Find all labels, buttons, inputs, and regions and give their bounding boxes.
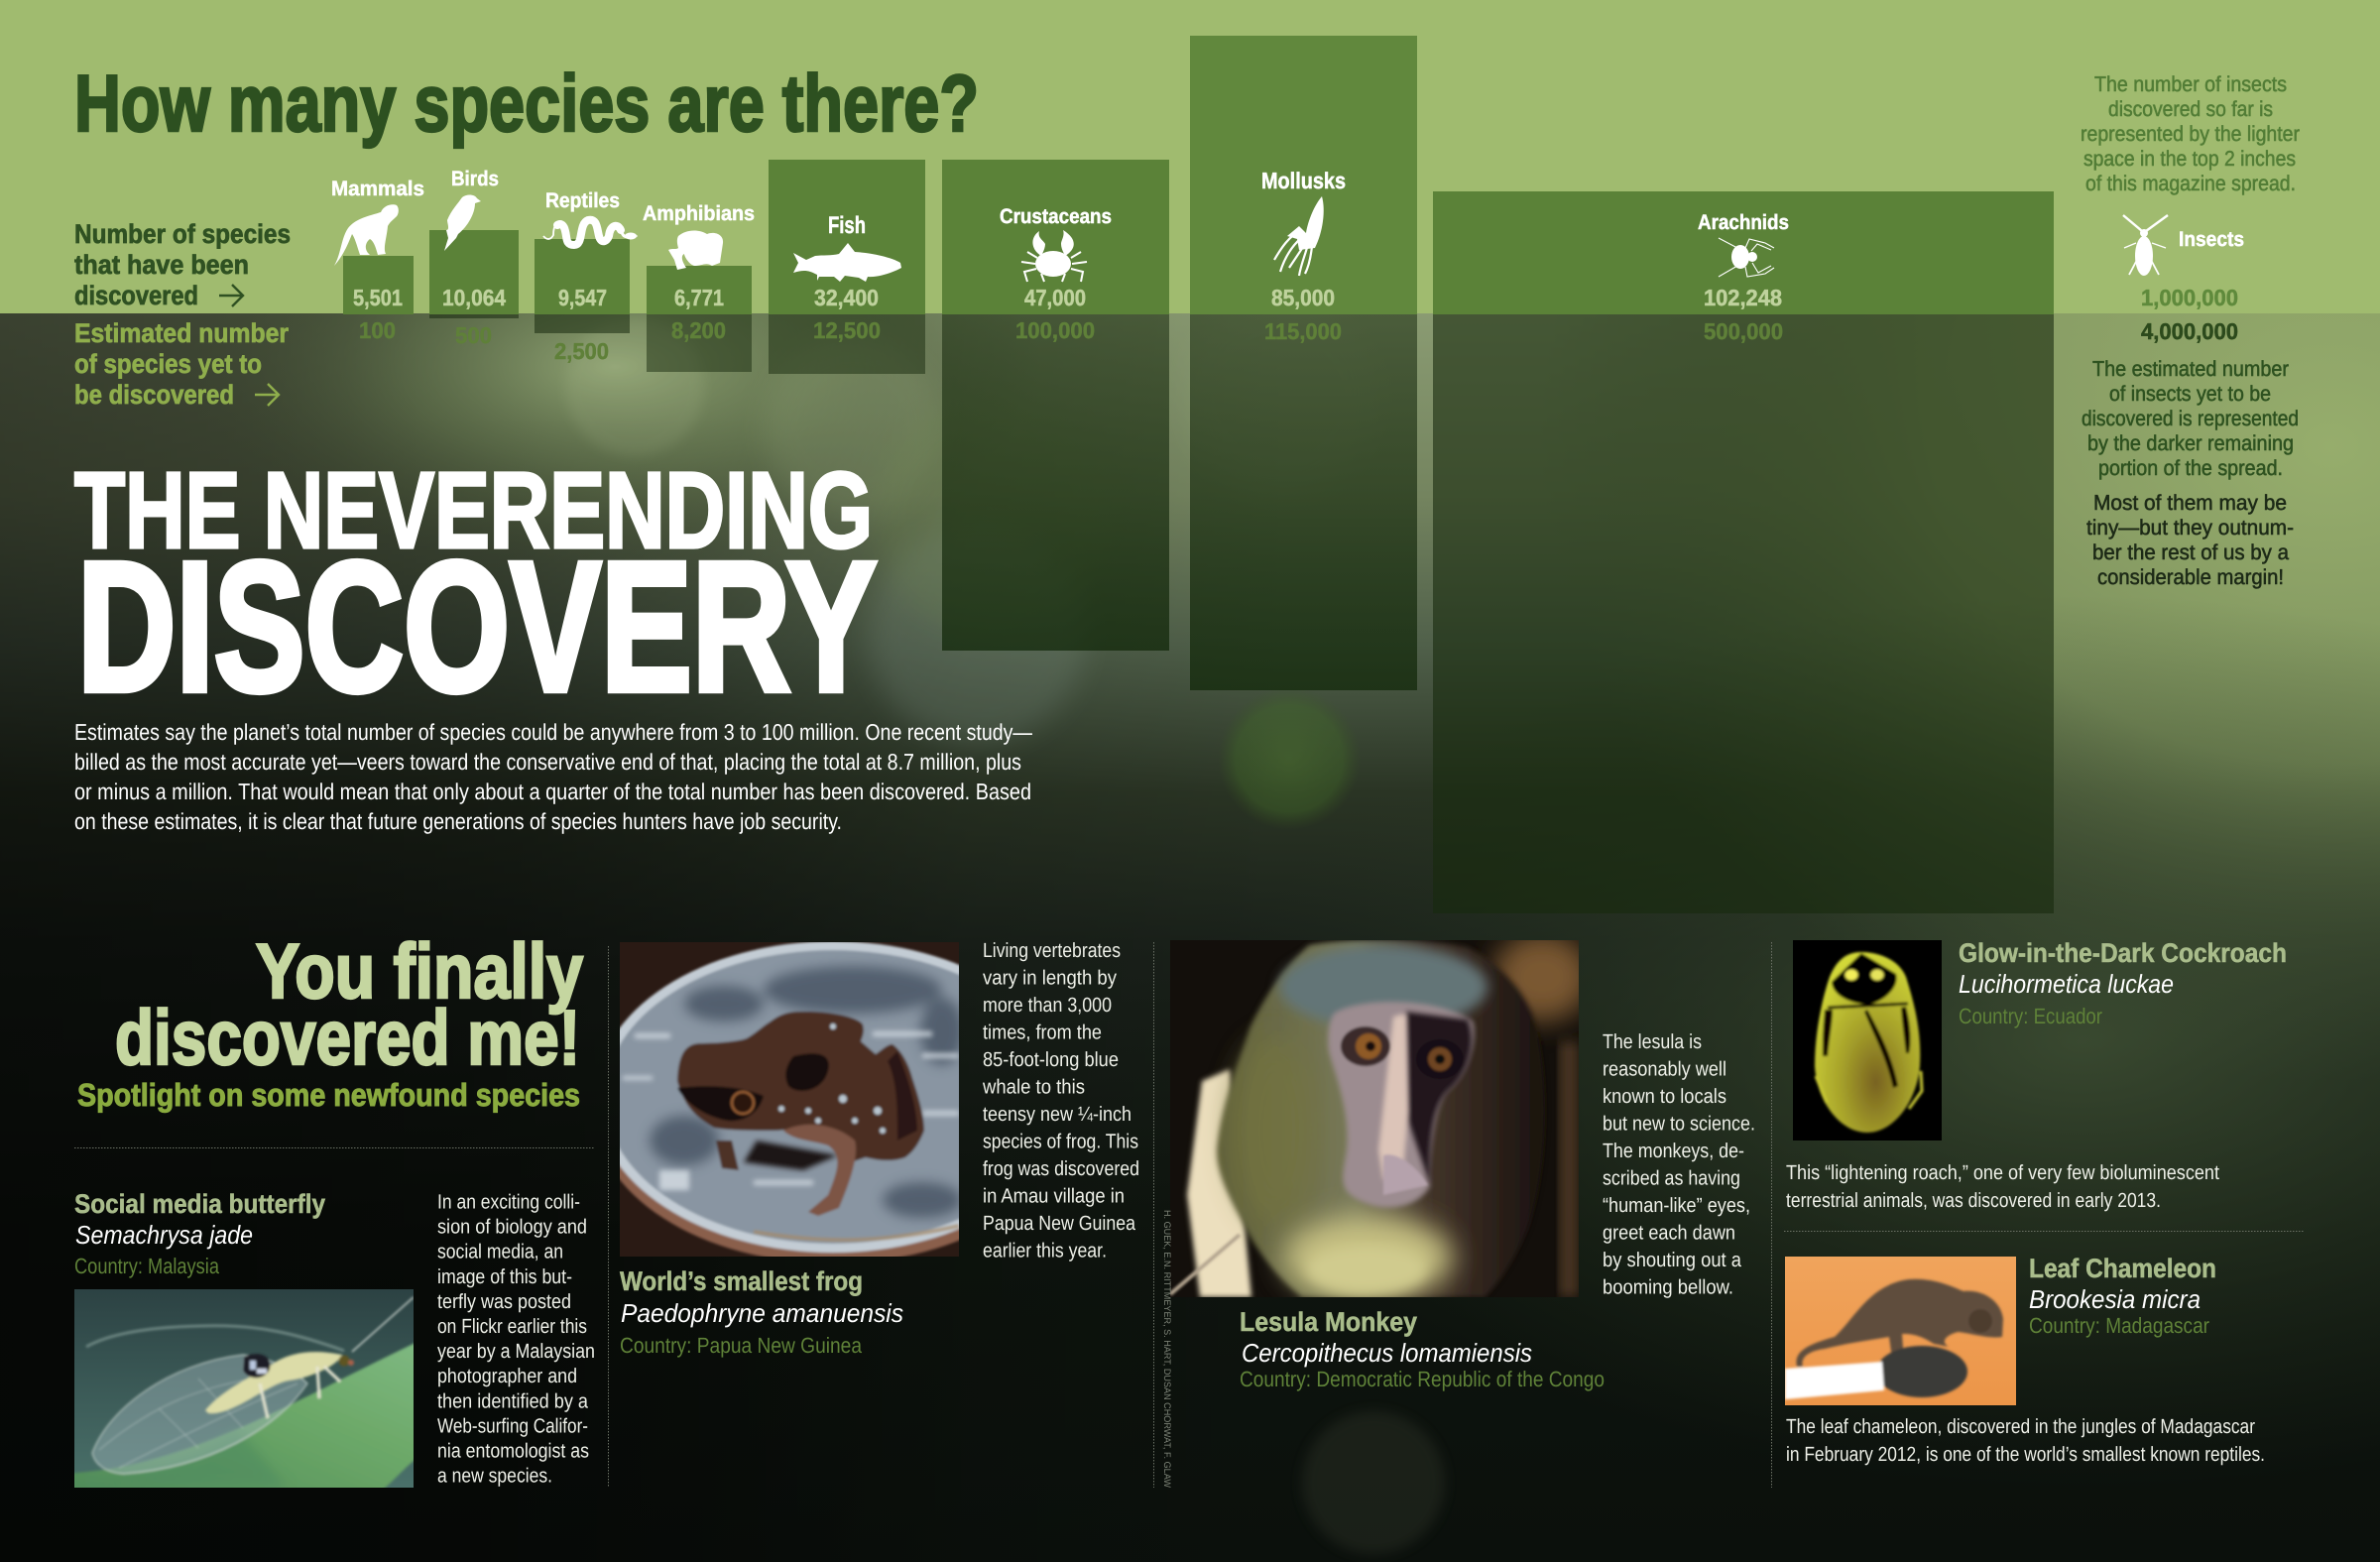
numbers: discovered: 10,064	[442, 285, 506, 310]
species heading: Cercopithecus lomamiensis	[1242, 1338, 1532, 1368]
numbers: yet to be discovered: 12,500	[813, 317, 881, 343]
text: insects yet to be discovered: The estimated number	[2092, 357, 2289, 381]
numbers: yet to be discovered: 100,000	[1015, 317, 1095, 343]
species heading: Country: Malaysia	[74, 1254, 220, 1278]
text: insects yet to be discovered: discovered is represented	[2082, 407, 2299, 430]
species heading: Semachrysa jade	[75, 1220, 253, 1250]
bar: birds	[429, 230, 519, 318]
title: the neverending discovery: DISCOVERY	[77, 525, 877, 730]
text: insects so far: discovered so far is	[2108, 97, 2273, 121]
bar: amphibians	[647, 266, 752, 372]
panel: world's smallest frog	[593, 939, 1139, 1358]
body text: The lesula is	[1603, 1030, 1702, 1053]
icon: spider	[1719, 238, 1774, 277]
body text: but new to science.	[1603, 1113, 1755, 1135]
text: insects margin note: tiny—but they outnum-	[2086, 516, 2294, 540]
bar: mollusks	[1190, 36, 1417, 690]
species heading: Lucihormetica luckae	[1959, 969, 2174, 999]
body text: whale to this	[982, 1075, 1085, 1099]
species heading: Glow-in-the-Dark Cockroach	[1959, 938, 2287, 968]
body text: This “lightening roach,” one of very few bioluminescent	[1786, 1161, 2219, 1184]
chart: species bars	[343, 36, 2054, 913]
body text: nia entomologist as	[437, 1440, 589, 1462]
text: insects margin note: considerable margin!	[2097, 565, 2284, 589]
species heading: Brookesia micra	[2029, 1284, 2201, 1314]
background: light green upper band	[0, 0, 2380, 314]
body text: teensy new ¼-inch	[983, 1103, 1131, 1126]
species heading: Country: Papua New Guinea	[620, 1333, 863, 1358]
species heading: Lesula Monkey	[1240, 1307, 1417, 1337]
text: insects yet to be discovered: portion of the spread.	[2098, 456, 2283, 480]
numbers: discovered: 32,400	[814, 285, 879, 310]
photo: frog on a coin	[620, 942, 959, 1257]
intro paragraph: billed as the most accurate yet—veers toward the conservative end of that, placing the total at 8.7 million, plus	[74, 749, 1021, 775]
numbers: yet to be discovered: 115,000	[1264, 318, 1342, 344]
body text: 85-foot-long blue	[983, 1048, 1119, 1071]
body text: image of this but-	[437, 1265, 572, 1288]
text: insects yet to be discovered	[2082, 357, 2299, 480]
photo: chameleon on a match	[1785, 1257, 2016, 1405]
category labels: Mollusks	[1261, 168, 1346, 193]
category labels: Insects	[2179, 228, 2244, 251]
text: insects so far: represented by the lighter	[2081, 122, 2300, 146]
text: insects margin note: ber the rest of us by a	[2092, 541, 2289, 564]
category labels	[331, 168, 2244, 251]
numbers: discovered: 9,547	[558, 285, 607, 310]
heading: how many species: How many species are there?	[74, 60, 979, 149]
numbers: yet to be discovered: 2,500	[554, 338, 609, 364]
photo: monkey face	[1170, 940, 1579, 1297]
body text: Web-surfing Califor-	[437, 1414, 588, 1437]
body text: scribed as having	[1603, 1166, 1740, 1190]
title: the neverending discovery	[74, 450, 877, 730]
numbers: discovered: 47,000	[1024, 285, 1086, 310]
body text	[1603, 1030, 1755, 1299]
numbers: yet to be discovered	[359, 317, 2238, 364]
label: number discovered: discovered	[74, 281, 198, 310]
species heading	[620, 1266, 903, 1358]
species heading: Social media butterfly	[74, 1189, 325, 1219]
numbers: yet to be discovered: 500	[455, 322, 492, 348]
text: insects so far: of this magazine spread.	[2085, 172, 2296, 195]
species heading: Country: Ecuador	[1959, 1004, 2102, 1028]
numbers: yet to be discovered: 500,000	[1704, 318, 1783, 344]
photo credit: H. GUEK, E.N. RITTMEYER, S. HART, DUSAN CHORWAT, F. GLAW	[1161, 1210, 1172, 1488]
panel: glow-in-the-dark cockroach	[1786, 938, 2287, 1212]
icon: insect	[2123, 215, 2168, 276]
panel: leaf chameleon	[1785, 1254, 2265, 1466]
body text	[982, 939, 1139, 1262]
bar: crustaceans	[942, 160, 1169, 651]
body text: reasonably well	[1603, 1057, 1726, 1081]
section heading: you finally discovered me: Spotlight on some newfound species	[77, 1077, 580, 1113]
photo: cockroach	[1793, 940, 1942, 1141]
body text: in Amau village in	[983, 1184, 1125, 1208]
icon: fish	[793, 243, 901, 282]
species heading: Paedophryne amanuensis	[621, 1298, 903, 1328]
body text: The leaf chameleon, discovered in the jungles of Madagascar	[1786, 1415, 2255, 1438]
icon: crab	[1021, 230, 1087, 282]
numbers: discovered: 85,000	[1271, 285, 1335, 310]
text: insects so far: space in the top 2 inches	[2083, 147, 2296, 171]
text: insects yet to be discovered: of insects yet to be	[2109, 382, 2271, 406]
intro paragraph: on these estimates, it is clear that future generations of species hunters have job security.	[74, 808, 842, 834]
body text: “human-like” eyes,	[1603, 1194, 1750, 1217]
text: insects yet to be discovered: by the darker remaining	[2087, 431, 2294, 455]
panel: social media butterfly	[64, 1189, 595, 1498]
text: insects so far	[2081, 72, 2300, 195]
text: insects margin note	[2086, 491, 2294, 589]
body text: more than 3,000	[983, 994, 1112, 1017]
category labels: Amphibians	[643, 202, 755, 225]
numbers: discovered: 1,000,000	[2141, 285, 2238, 310]
icon: bird	[444, 194, 481, 251]
body text	[1786, 1415, 2265, 1466]
label: number discovered: Number of species	[74, 219, 291, 249]
label: number yet to be discovered: be discovered	[74, 380, 234, 410]
body text: booming bellow.	[1603, 1275, 1733, 1299]
numbers: yet to be discovered: 8,200	[671, 317, 726, 343]
body text: earlier this year.	[983, 1240, 1107, 1262]
text: insects so far: The number of insects	[2094, 72, 2287, 96]
icon: squid	[1274, 196, 1324, 276]
numbers: yet to be discovered: 4,000,000	[2141, 318, 2238, 344]
panel: lesula monkey	[1161, 932, 1755, 1488]
body text	[1786, 1161, 2219, 1212]
bar: arachnids	[1433, 191, 2054, 913]
numbers: discovered	[353, 285, 2238, 310]
category labels: Birds	[451, 168, 499, 190]
body text: In an exciting colli-	[437, 1190, 580, 1214]
label: number yet to be discovered: Estimated number	[74, 318, 289, 348]
label: number discovered: that have been	[74, 250, 249, 280]
photo: lacewing on a leaf	[74, 1289, 414, 1488]
bar: reptiles	[535, 239, 630, 333]
body text: frog was discovered	[983, 1157, 1139, 1180]
numbers: yet to be discovered: 100	[359, 317, 396, 343]
body text: on Flickr earlier this	[437, 1315, 587, 1338]
icon: frog	[668, 230, 723, 270]
body text: terfly was posted	[437, 1290, 571, 1313]
intro paragraph	[74, 719, 1032, 834]
species heading	[74, 1189, 325, 1278]
section heading: you finally discovered me: You finally	[256, 927, 583, 1015]
intro paragraph: Estimates say the planet’s total number of species could be anywhere from 3 to 100 million. One recent study—	[74, 719, 1032, 745]
text: insects margin note: Most of them may be	[2093, 491, 2287, 515]
species heading: Country: Madagascar	[2029, 1313, 2209, 1338]
body text: species of frog. This	[983, 1131, 1138, 1152]
body text: photographer and	[437, 1365, 577, 1387]
body text: greet each dawn	[1603, 1222, 1735, 1244]
body text: Papua New Guinea	[983, 1212, 1136, 1235]
label: number discovered	[74, 219, 291, 310]
body text: The monkeys, de-	[1603, 1140, 1744, 1162]
category labels: Crustaceans	[1000, 205, 1112, 228]
category labels: Mammals	[331, 178, 424, 200]
species heading	[1240, 1307, 1605, 1391]
body text: a new species.	[437, 1465, 552, 1488]
body text: sion of biology and	[437, 1216, 587, 1239]
icon: snake	[543, 220, 638, 245]
body text: known to locals	[1603, 1085, 1726, 1108]
numbers: discovered: 102,248	[1704, 285, 1782, 310]
numbers: discovered: 5,501	[353, 285, 403, 310]
body text: Living vertebrates	[983, 939, 1121, 962]
title: the neverending discovery: THE NEVERENDING	[74, 450, 873, 571]
species heading: Country: Democratic Republic of the Congo	[1240, 1367, 1605, 1391]
numbers: discovered: 6,771	[674, 285, 724, 310]
intro paragraph: or minus a million. That would mean that only about a quarter of the total number has been discovered. Based	[74, 779, 1031, 804]
body text: social media, an	[437, 1241, 563, 1263]
body text: in February 2012, is one of the world’s smallest known reptiles.	[1786, 1443, 2265, 1466]
body text: then identified by a	[437, 1389, 589, 1412]
category labels: Fish	[828, 212, 866, 239]
species heading: World’s smallest frog	[620, 1266, 863, 1296]
species heading: Leaf Chameleon	[2029, 1254, 2216, 1283]
icon: monkey	[334, 204, 399, 266]
category labels: Reptiles	[545, 189, 620, 212]
category labels: Arachnids	[1698, 211, 1789, 234]
body text: vary in length by	[983, 966, 1118, 990]
label: number yet to be discovered: of species yet to	[74, 349, 262, 379]
section heading: you finally discovered me: discovered me!	[115, 994, 580, 1081]
body text: by shouting out a	[1603, 1249, 1742, 1271]
bar: fish	[769, 160, 925, 374]
label: number yet to be discovered	[74, 318, 289, 410]
section heading: you finally discovered me	[77, 927, 583, 1113]
bar: mammals	[343, 256, 414, 314]
body text: times, from the	[983, 1021, 1102, 1043]
body text: terrestrial animals, was discovered in early 2013.	[1786, 1189, 2161, 1212]
species heading	[1959, 938, 2287, 1028]
species heading	[2029, 1254, 2216, 1338]
body text: year by a Malaysian	[437, 1340, 595, 1363]
body text	[437, 1190, 595, 1488]
